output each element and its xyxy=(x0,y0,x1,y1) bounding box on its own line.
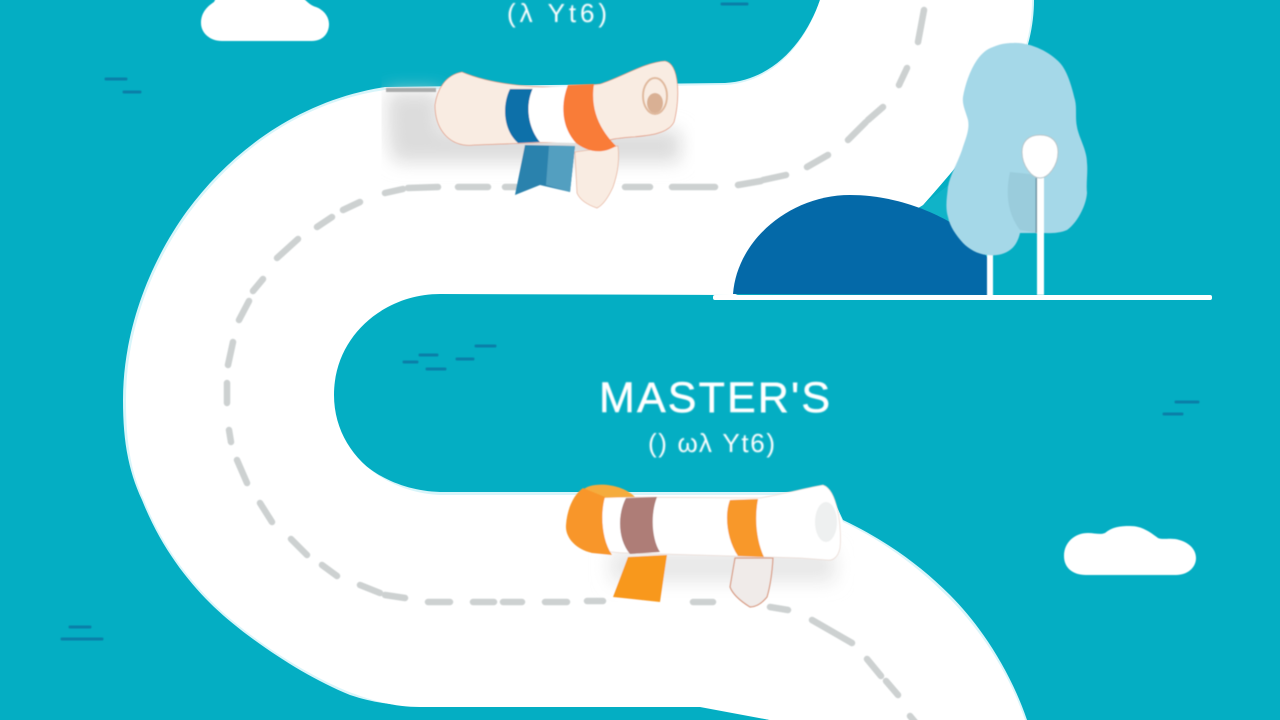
ribbon: cream tail xyxy=(575,146,619,208)
heading: MASTER'S: MASTER'S xyxy=(599,374,830,422)
scroll end xyxy=(643,78,667,114)
subtitle: master's years: () ωλ Yt6) xyxy=(648,428,775,458)
orange cap xyxy=(583,485,635,498)
cloud: right xyxy=(1064,526,1196,575)
scroll icon: upper diploma xyxy=(386,61,680,208)
scroll end xyxy=(815,502,837,542)
tree: small white lamp xyxy=(1022,135,1058,295)
hill xyxy=(733,195,990,295)
inner darker lobe xyxy=(1008,172,1038,233)
winding white road xyxy=(123,0,1034,720)
lower scroll shadow xyxy=(610,550,835,582)
scroll body xyxy=(575,485,840,560)
band: orange xyxy=(563,84,616,151)
ribbon: pale tail xyxy=(730,558,773,607)
tree: large xyxy=(946,43,1087,296)
teal gap behind tree xyxy=(920,184,955,230)
band: blue xyxy=(505,89,540,143)
ribbon: orange tail xyxy=(613,555,667,602)
shadow top strip xyxy=(386,88,436,92)
wave marks xyxy=(62,4,1198,639)
ground line xyxy=(713,295,1212,300)
band: white xyxy=(529,86,576,143)
ribbon: blue fold xyxy=(546,146,575,192)
band: mauve xyxy=(620,497,660,554)
scroll body xyxy=(435,61,678,145)
road centre dashed line xyxy=(227,10,924,720)
scroll icon: lower diploma xyxy=(566,485,840,607)
cloud: top xyxy=(201,0,329,41)
scroll shadow xyxy=(387,92,680,162)
orange end band xyxy=(566,488,612,555)
band: orange xyxy=(727,499,764,557)
ribbon: blue tail xyxy=(515,145,575,195)
